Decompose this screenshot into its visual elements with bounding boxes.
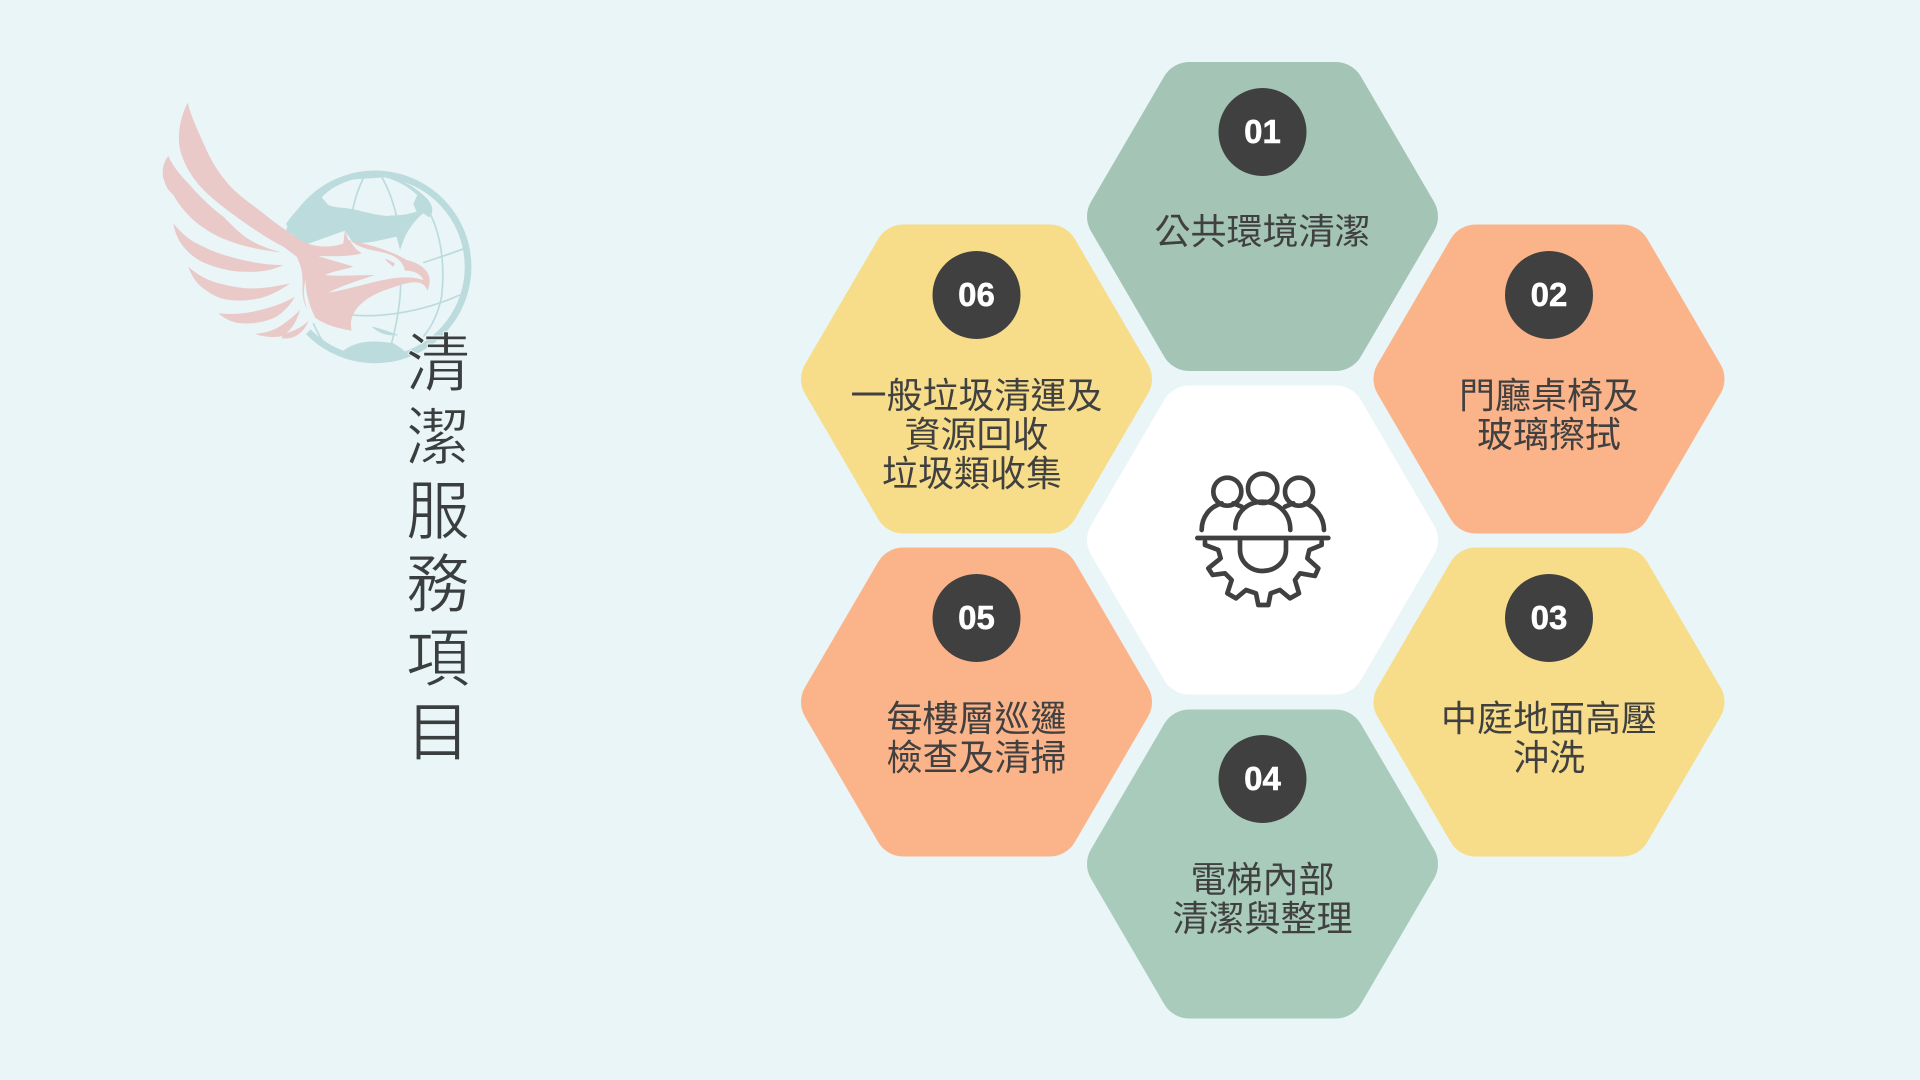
title: 服	[406, 476, 470, 548]
panel 01: 公共環境清潔	[1154, 211, 1371, 252]
panel 04: 04	[1244, 760, 1281, 797]
panel 03: 03	[1531, 599, 1567, 636]
logo: eagle and globe	[163, 103, 468, 362]
panel 01	[1116, 88, 1409, 342]
panel 02: 玻璃擦拭	[1477, 414, 1621, 455]
eagle head highlights	[304, 239, 423, 328]
panel 06	[830, 251, 1123, 504]
panel 02: 02	[1531, 276, 1567, 313]
panel 04	[1116, 735, 1409, 990]
title: 項	[406, 623, 470, 695]
panel 06: 垃圾類收集	[882, 453, 1062, 494]
center hexagon with team gear icon	[1116, 414, 1409, 666]
panel 06: 一般垃圾清運及	[850, 375, 1103, 416]
panel 04: 清潔與整理	[1172, 898, 1353, 939]
panel 05: 05	[958, 599, 995, 636]
globe	[286, 174, 468, 362]
eagle	[163, 103, 430, 339]
panel 03	[1402, 574, 1696, 828]
panel 04: 電梯內部	[1190, 859, 1335, 900]
panel 03: 沖洗	[1513, 737, 1585, 778]
title: 潔	[406, 402, 470, 474]
icon: people and gear	[1197, 474, 1328, 605]
title: 務	[406, 549, 470, 621]
panel 06: 資源回收	[904, 414, 1049, 455]
title: 清	[406, 328, 470, 400]
panel 03: 中庭地面高壓	[1441, 698, 1657, 739]
panel 05: 檢查及清掃	[886, 737, 1067, 778]
panel 02	[1402, 251, 1696, 504]
panel 05: 每樓層巡邏	[886, 698, 1067, 739]
title: 目	[406, 697, 470, 769]
panel 01: 01	[1244, 113, 1281, 150]
panel 02: 門廳桌椅及	[1459, 375, 1639, 416]
title	[406, 328, 470, 769]
panel 06: 06	[958, 276, 995, 313]
panel 05	[830, 574, 1123, 828]
